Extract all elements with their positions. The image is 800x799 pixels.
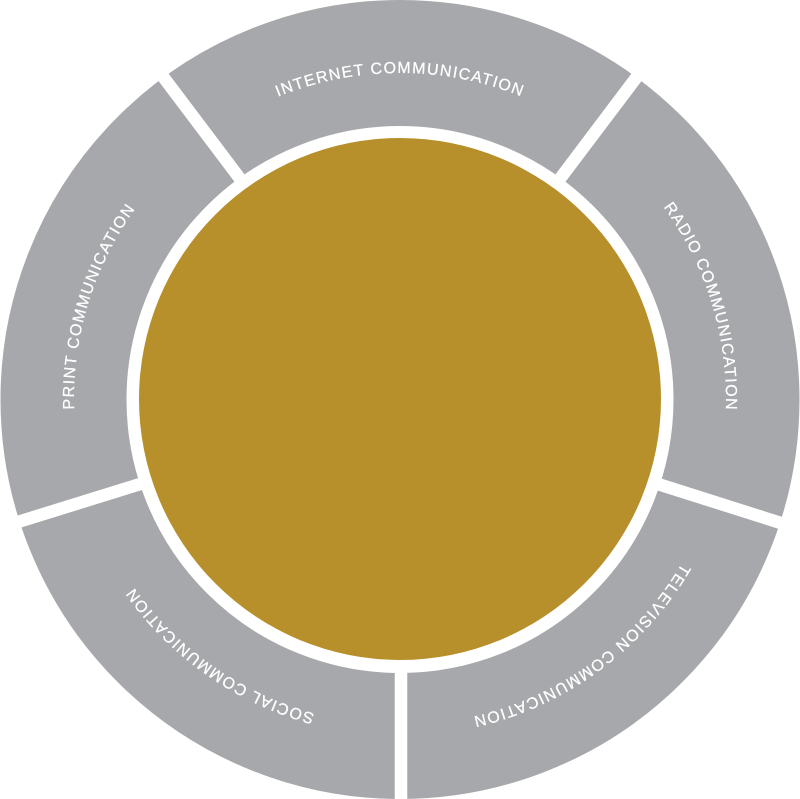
label: social communication: SOCIAL COMMUNICATION: [126, 588, 314, 724]
center gold circle: [139, 138, 661, 660]
label: television communication: TELEVISION COMMUNICATION: [474, 566, 692, 728]
label: radio communication: RADIO COMMUNICATION: [664, 202, 738, 409]
grey outer ring: [64, 63, 736, 736]
label: internet communication: INTERNET COMMUNICATION: [275, 62, 524, 96]
label: print communication: PRINT COMMUNICATION: [62, 204, 134, 408]
